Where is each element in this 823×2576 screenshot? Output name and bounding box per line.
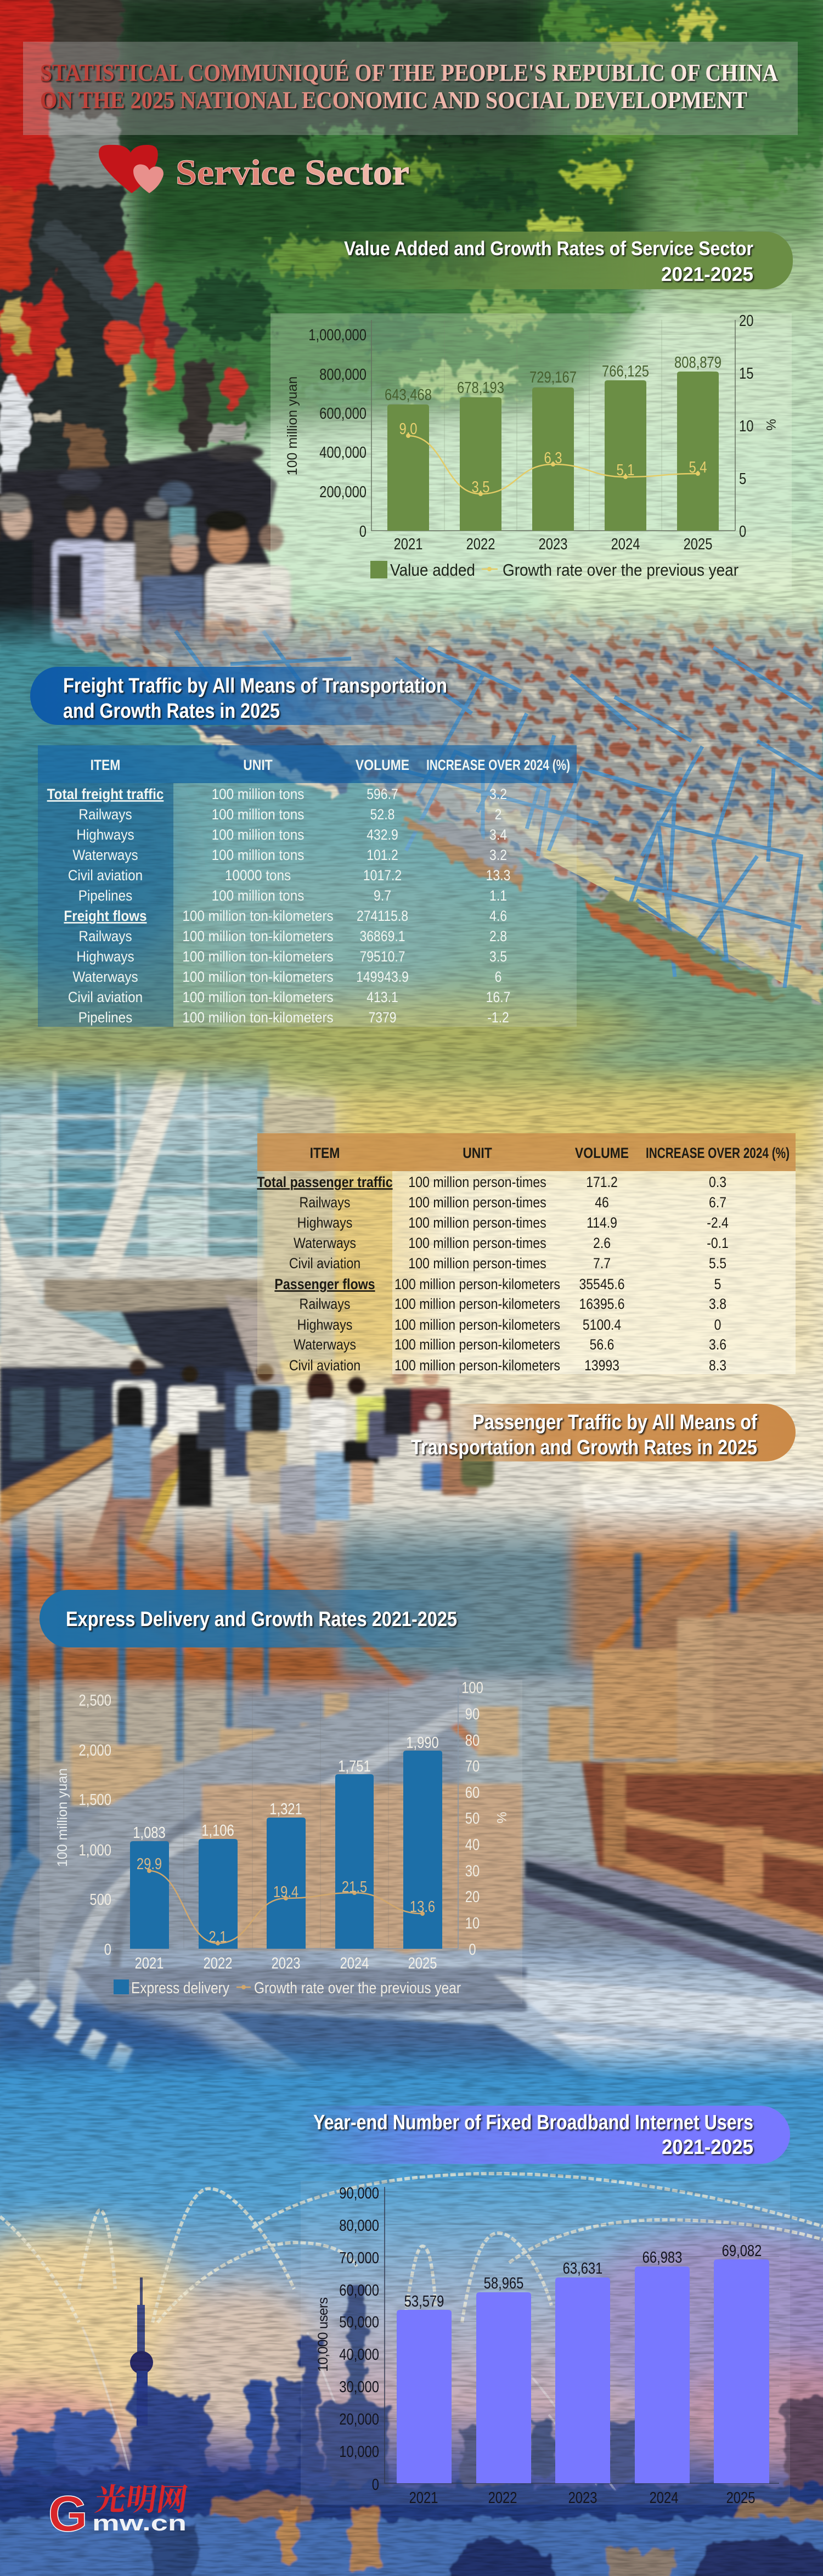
x axis labels: 2021 bbox=[135, 1954, 164, 1972]
y axis labels: 200,000 bbox=[319, 483, 367, 501]
y axis labels: 30,000 bbox=[339, 2378, 379, 2396]
column: increase: 0.3 bbox=[709, 1174, 726, 1190]
logo: Gmw.cn: mw.cn bbox=[92, 2511, 187, 2535]
column: volume: 7.7 bbox=[593, 1255, 611, 1272]
growth rate line bbox=[406, 434, 700, 496]
growth rate labels: 9.0 bbox=[399, 420, 418, 438]
y axis labels: 80,000 bbox=[339, 2217, 379, 2235]
column: unit: 100 million person-kilometers bbox=[394, 1336, 560, 1353]
column: increase bbox=[486, 786, 510, 1026]
legend: Express delivery bbox=[131, 1979, 229, 1997]
bar value labels: 63,631 bbox=[563, 2259, 602, 2277]
icon: fireworks bbox=[0, 2174, 823, 2322]
table header row: VOLUME bbox=[575, 1145, 629, 1161]
column: item: Pipelines bbox=[78, 888, 132, 904]
right axis labels: 15 bbox=[739, 364, 753, 383]
right axis labels: 20 bbox=[465, 1888, 480, 1906]
column: unit: 100 million person-times bbox=[408, 1235, 546, 1251]
column: volume: 149943.9 bbox=[356, 969, 409, 985]
y axis labels: 1,000 bbox=[79, 1841, 111, 1859]
column: unit: 100 million tons bbox=[212, 827, 304, 843]
growth rate labels: 3.5 bbox=[471, 478, 490, 496]
y axis labels: 0 bbox=[372, 2476, 379, 2494]
table header row bbox=[310, 1145, 790, 1162]
y axis labels: 400,000 bbox=[319, 443, 367, 462]
y axis labels: 0 bbox=[104, 1941, 111, 1959]
column: increase: 0 bbox=[714, 1317, 721, 1333]
column: increase: -1.2 bbox=[487, 1009, 509, 1026]
title: ON THE 2025 NATIONAL ECONOMIC AND SOCIAL DEVELOPMENT bbox=[40, 87, 747, 114]
section heading: Service Sector bbox=[99, 145, 409, 193]
icon: Oriental Pearl tower bbox=[130, 2277, 153, 2426]
column: item: Civil aviation bbox=[68, 868, 143, 884]
column: unit: 100 million tons bbox=[212, 847, 304, 863]
right axis labels: 30 bbox=[465, 1862, 480, 1880]
x axis labels: 2023 bbox=[539, 535, 567, 553]
legend: Value added bbox=[390, 560, 475, 580]
table: freight traffic bbox=[38, 745, 577, 1027]
title panel bbox=[23, 42, 798, 135]
right axis labels bbox=[739, 312, 753, 541]
background: railway station painting bbox=[0, 1043, 823, 1570]
column: volume: 46 bbox=[595, 1194, 609, 1211]
growth rate labels: 29.9 bbox=[137, 1855, 162, 1873]
column: unit: 100 million person-kilometers bbox=[394, 1357, 560, 1374]
x axis labels: 2024 bbox=[340, 1954, 369, 1972]
x axis labels: 2022 bbox=[204, 1954, 232, 1972]
column: item: Total freight traffic bbox=[47, 786, 164, 802]
table heading: freight traffic: Freight Traffic by All Means of Transportation bbox=[63, 674, 447, 698]
growth rate labels: 2.1 bbox=[208, 1928, 227, 1946]
x axis labels bbox=[394, 535, 712, 553]
logo: Gmw.cn: 光明网 bbox=[93, 2483, 190, 2517]
column: unit bbox=[394, 1174, 560, 1374]
column: volume: 35545.6 bbox=[579, 1276, 624, 1292]
bar value labels: 53,579 bbox=[404, 2292, 444, 2310]
column: item: Civil aviation bbox=[68, 989, 143, 1005]
bar value labels: 1,990 bbox=[406, 1734, 439, 1752]
bars bbox=[397, 2259, 769, 2483]
y axis labels: 40,000 bbox=[339, 2346, 379, 2364]
column: item: Civil aviation bbox=[289, 1357, 360, 1374]
right axis labels: 0 bbox=[469, 1941, 476, 1959]
bar value labels bbox=[385, 353, 721, 404]
column: unit: 100 million person-kilometers bbox=[394, 1276, 560, 1292]
x axis labels: 2025 bbox=[726, 2489, 755, 2507]
y axis labels bbox=[308, 326, 367, 541]
column: increase: 2 bbox=[495, 806, 501, 823]
axis title: percent: % bbox=[494, 1812, 509, 1824]
x axis labels: 2023 bbox=[272, 1954, 300, 1972]
y axis labels: 90,000 bbox=[339, 2184, 379, 2202]
column: unit: 100 million person-kilometers bbox=[394, 1317, 560, 1333]
growth rate labels: 6.3 bbox=[544, 449, 562, 467]
growth rate labels: 5.1 bbox=[616, 461, 635, 479]
column: volume: 413.1 bbox=[367, 989, 398, 1005]
column: unit bbox=[182, 786, 334, 1026]
column: item: Waterways bbox=[72, 847, 138, 863]
column: increase: 3.8 bbox=[709, 1296, 726, 1312]
background: crowd of people bbox=[0, 444, 296, 659]
y axis labels: 1,500 bbox=[79, 1791, 111, 1809]
growth rate labels: 5.4 bbox=[689, 458, 707, 476]
background: travelers on platform bbox=[112, 1359, 494, 1534]
x axis labels: 2025 bbox=[684, 535, 712, 553]
y axis labels bbox=[79, 1691, 111, 1959]
table header row: INCREASE OVER 2024 (%) bbox=[646, 1145, 790, 1162]
right axis labels: 80 bbox=[465, 1731, 480, 1750]
panel: value added chart bbox=[270, 312, 792, 590]
table header row: UNIT bbox=[243, 757, 273, 773]
column: unit: 100 million person-kilometers bbox=[394, 1296, 560, 1312]
column: volume: 5100.4 bbox=[583, 1317, 621, 1333]
x axis labels: 2024 bbox=[650, 2489, 678, 2507]
column: increase: 3.4 bbox=[489, 826, 507, 843]
table heading: freight traffic bbox=[30, 667, 477, 725]
table header row: ITEM bbox=[91, 757, 120, 773]
icon: city skyline bbox=[0, 2283, 823, 2576]
column: unit: 100 million ton-kilometers bbox=[182, 929, 334, 944]
table heading: freight traffic: and Growth Rates in 2025 bbox=[63, 700, 280, 723]
bar value labels bbox=[133, 1734, 439, 1842]
column: increase: -2.4 bbox=[707, 1214, 729, 1231]
legend: Growth rate over the previous year bbox=[254, 1979, 461, 1997]
table header row: UNIT bbox=[463, 1145, 492, 1161]
right axis labels: 20 bbox=[739, 312, 753, 330]
section heading: Service Sector: Service Sector bbox=[176, 153, 409, 193]
y axis labels: 0 bbox=[359, 522, 367, 541]
y axis labels: 1,000,000 bbox=[308, 326, 367, 344]
column: volume: 171.2 bbox=[586, 1174, 618, 1190]
column: item: Highways bbox=[76, 949, 134, 965]
x axis labels: 2022 bbox=[466, 535, 495, 553]
growth rate labels: 19.4 bbox=[273, 1883, 298, 1901]
column: increase: 2.8 bbox=[489, 928, 507, 944]
table header row: INCREASE OVER 2024 (%) bbox=[426, 757, 570, 774]
column: item: Highways bbox=[76, 827, 134, 843]
column: increase: 3.6 bbox=[709, 1336, 726, 1353]
bar value labels: 1,751 bbox=[338, 1757, 371, 1775]
growth rate line bbox=[147, 1869, 425, 1945]
column: volume bbox=[579, 1174, 624, 1374]
x axis labels: 2021 bbox=[409, 2489, 438, 2507]
y axis labels: 60,000 bbox=[339, 2281, 379, 2299]
table: passenger traffic bbox=[257, 1133, 796, 1374]
column: item: Waterways bbox=[72, 969, 138, 985]
right axis labels: 50 bbox=[465, 1809, 480, 1827]
column: unit: 100 million ton-kilometers bbox=[182, 969, 334, 985]
column: item: Highways bbox=[297, 1214, 352, 1231]
column: volume: 7379 bbox=[368, 1009, 397, 1026]
right axis labels: 40 bbox=[465, 1836, 480, 1854]
column: item: Waterways bbox=[294, 1336, 356, 1353]
bar value labels bbox=[404, 2242, 762, 2310]
right axis labels: 60 bbox=[465, 1784, 480, 1802]
column: unit: 100 million tons bbox=[212, 786, 304, 802]
bars bbox=[130, 1751, 442, 1949]
bar value labels: 1,321 bbox=[269, 1800, 302, 1818]
y axis labels: 2,500 bbox=[79, 1691, 111, 1709]
column: unit: 100 million person-times bbox=[408, 1214, 546, 1231]
column: volume: 114.9 bbox=[587, 1214, 617, 1231]
y axis labels: 800,000 bbox=[319, 365, 367, 384]
column: item: Highways bbox=[297, 1317, 352, 1333]
y axis labels bbox=[339, 2184, 379, 2494]
column: volume: 596.7 bbox=[367, 786, 398, 802]
table heading: passenger traffic: Transportation and Growth Rates in 2025 bbox=[411, 1436, 757, 1459]
y axis labels: 70,000 bbox=[339, 2249, 379, 2267]
growth rate labels bbox=[137, 1855, 435, 1946]
background: warehouse painting bbox=[0, 1498, 823, 2085]
bar value labels: 678,193 bbox=[457, 379, 504, 397]
background: street and tree painting bbox=[0, 0, 823, 659]
column: item: Railways bbox=[300, 1194, 350, 1211]
column: volume: 36869.1 bbox=[360, 928, 405, 944]
column: item: Railways bbox=[300, 1296, 350, 1312]
column: increase: 6 bbox=[495, 969, 501, 985]
foliage bbox=[181, 0, 823, 439]
icon: hearts bbox=[99, 145, 164, 193]
legend: Growth rate over the previous year bbox=[503, 560, 739, 580]
column: volume: 16395.6 bbox=[579, 1296, 624, 1312]
growth rate labels: 13.6 bbox=[410, 1898, 435, 1916]
y axis labels: 20,000 bbox=[339, 2410, 379, 2428]
column: volume: 9.7 bbox=[374, 887, 391, 904]
chart heading: value added: Value Added and Growth Rates of Service Sector bbox=[344, 237, 753, 260]
bar value labels: 1,083 bbox=[133, 1824, 166, 1842]
x axis labels: 2021 bbox=[394, 535, 422, 553]
background: container port painting bbox=[0, 598, 823, 1092]
column: unit: 100 million ton-kilometers bbox=[182, 989, 334, 1005]
table heading: passenger traffic: Passenger Traffic by All Means of bbox=[472, 1411, 757, 1434]
column: increase: 4.6 bbox=[489, 908, 507, 924]
bar value labels: 1,106 bbox=[201, 1821, 234, 1840]
logo: Gmw.cn: G bbox=[48, 2486, 88, 2542]
column: increase: -0.1 bbox=[707, 1235, 729, 1251]
y axis labels: 2,000 bbox=[79, 1741, 111, 1759]
x axis labels bbox=[409, 2489, 755, 2507]
column: item: Railways bbox=[78, 929, 132, 944]
column: volume: 432.9 bbox=[367, 826, 398, 843]
column: unit: 100 million person-times bbox=[408, 1255, 546, 1272]
column: increase: 6.7 bbox=[709, 1194, 726, 1211]
column: unit: 100 million ton-kilometers bbox=[182, 1010, 334, 1026]
column: volume: 1017.2 bbox=[363, 867, 402, 884]
column: item: Civil aviation bbox=[289, 1255, 360, 1272]
bar value labels: 58,965 bbox=[484, 2274, 523, 2292]
legend bbox=[114, 1979, 461, 1997]
axis title: 10,000 users: 10,000 users bbox=[315, 2297, 331, 2372]
chart heading: broadband users: Year-end Number of Fixed Broadband Internet Users bbox=[313, 2111, 753, 2134]
right axis labels: 5 bbox=[739, 470, 746, 488]
panel: express delivery chart bbox=[40, 1679, 522, 2004]
column: item: Railways bbox=[78, 807, 132, 823]
column: increase: 16.7 bbox=[486, 989, 510, 1005]
column: item: Waterways bbox=[294, 1235, 356, 1251]
column: increase: 8.3 bbox=[709, 1357, 726, 1374]
column: volume bbox=[356, 786, 409, 1026]
column: increase: 1.1 bbox=[489, 887, 507, 904]
right axis labels: 70 bbox=[465, 1757, 480, 1775]
column: increase: 3.2 bbox=[489, 847, 507, 863]
title bbox=[40, 59, 778, 114]
x axis labels: 2024 bbox=[611, 535, 640, 553]
y axis labels: 10,000 bbox=[339, 2443, 379, 2461]
column: unit: 100 million ton-kilometers bbox=[182, 908, 334, 924]
x axis labels: 2022 bbox=[488, 2489, 517, 2507]
column: item: Pipelines bbox=[78, 1010, 132, 1026]
chart heading: broadband users bbox=[296, 2106, 790, 2164]
right axis labels: 10 bbox=[465, 1914, 480, 1932]
right axis labels: 90 bbox=[465, 1705, 480, 1723]
column: increase bbox=[707, 1174, 729, 1374]
column: unit: 100 million tons bbox=[212, 888, 304, 904]
chart heading: broadband users: 2021-2025 bbox=[662, 2136, 753, 2159]
column: increase: 5.5 bbox=[709, 1255, 726, 1272]
column: unit: 100 million person-times bbox=[408, 1194, 546, 1211]
column: volume: 79510.7 bbox=[360, 948, 405, 965]
legend bbox=[370, 560, 739, 580]
icon: container ships bbox=[189, 724, 785, 1000]
table header row bbox=[91, 757, 570, 774]
column: volume: 2.6 bbox=[593, 1235, 611, 1251]
bars bbox=[387, 372, 719, 531]
bar value labels: 808,879 bbox=[674, 353, 721, 372]
chart heading: express delivery bbox=[40, 1590, 483, 1647]
panel: broadband users chart bbox=[301, 2181, 790, 2507]
chart heading: value added bbox=[307, 232, 793, 289]
icon: cranes bbox=[176, 631, 823, 988]
chart heading: express delivery: Express Delivery and Growth Rates 2021-2025 bbox=[66, 1608, 457, 1631]
x axis labels: 2025 bbox=[408, 1954, 437, 1972]
right axis labels bbox=[461, 1679, 483, 1959]
y axis labels: 500 bbox=[89, 1891, 111, 1909]
column: item: Passenger flows bbox=[274, 1276, 375, 1292]
column: item bbox=[257, 1174, 393, 1374]
column: volume: 52.8 bbox=[370, 806, 394, 823]
column: volume: 101.2 bbox=[367, 847, 398, 863]
y axis labels: 600,000 bbox=[319, 404, 367, 423]
column: unit: 100 million tons bbox=[212, 807, 304, 823]
right axis labels: 10 bbox=[739, 417, 753, 435]
axis title: 100 million yuan: 100 million yuan bbox=[55, 1768, 70, 1867]
column: volume: 13993 bbox=[584, 1357, 619, 1374]
table heading: passenger traffic bbox=[411, 1404, 796, 1461]
column: volume: 274115.8 bbox=[357, 908, 408, 924]
bar value labels: 766,125 bbox=[602, 362, 649, 380]
column: increase: 5 bbox=[714, 1276, 721, 1292]
bar value labels: 643,468 bbox=[385, 386, 432, 404]
growth rate labels bbox=[399, 420, 707, 496]
x axis labels: 2023 bbox=[568, 2489, 597, 2507]
column: increase: 3.5 bbox=[489, 948, 507, 965]
column: item: Freight flows bbox=[64, 908, 147, 924]
logo: Gmw.cn bbox=[48, 2483, 190, 2542]
right axis labels: 100 bbox=[461, 1679, 483, 1697]
background: city skyline painting bbox=[0, 2036, 823, 2576]
right axis labels: 0 bbox=[739, 522, 746, 541]
table header row: ITEM bbox=[310, 1145, 340, 1161]
bar value labels: 729,167 bbox=[529, 368, 577, 386]
axis title: percent: % bbox=[763, 419, 778, 431]
column: unit: 10000 tons bbox=[225, 868, 291, 884]
chart heading: value added: 2021-2025 bbox=[661, 263, 753, 285]
growth rate labels: 21.5 bbox=[342, 1878, 367, 1896]
column: item bbox=[47, 786, 164, 1026]
column: increase: 13.3 bbox=[486, 867, 510, 884]
bar value labels: 66,983 bbox=[642, 2248, 682, 2266]
column: volume: 56.6 bbox=[590, 1336, 614, 1353]
x axis labels bbox=[135, 1954, 437, 1972]
column: unit: 100 million ton-kilometers bbox=[182, 949, 334, 965]
axis title: 100 million yuan: 100 million yuan bbox=[285, 376, 300, 475]
table header row: VOLUME bbox=[356, 757, 409, 773]
column: item: Total passenger traffic bbox=[257, 1174, 393, 1190]
y axis labels: 50,000 bbox=[339, 2313, 379, 2331]
column: unit: 100 million person-times bbox=[408, 1174, 546, 1190]
column: increase: 3.2 bbox=[489, 786, 507, 802]
bar value labels: 69,082 bbox=[722, 2242, 762, 2260]
